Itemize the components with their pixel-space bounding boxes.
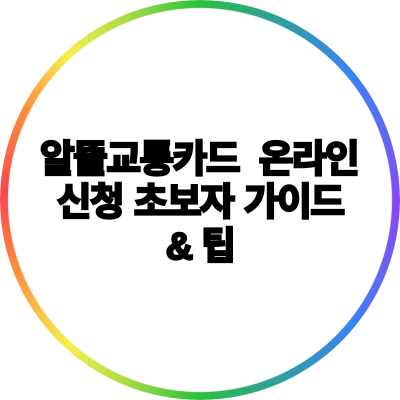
title line 2: 신청 초보자 가이드 — [57, 182, 343, 224]
title — [40, 138, 358, 268]
title line 1: 알뜰교통카드 온라인 — [40, 139, 358, 181]
title line 3: & 팁 — [166, 226, 234, 268]
